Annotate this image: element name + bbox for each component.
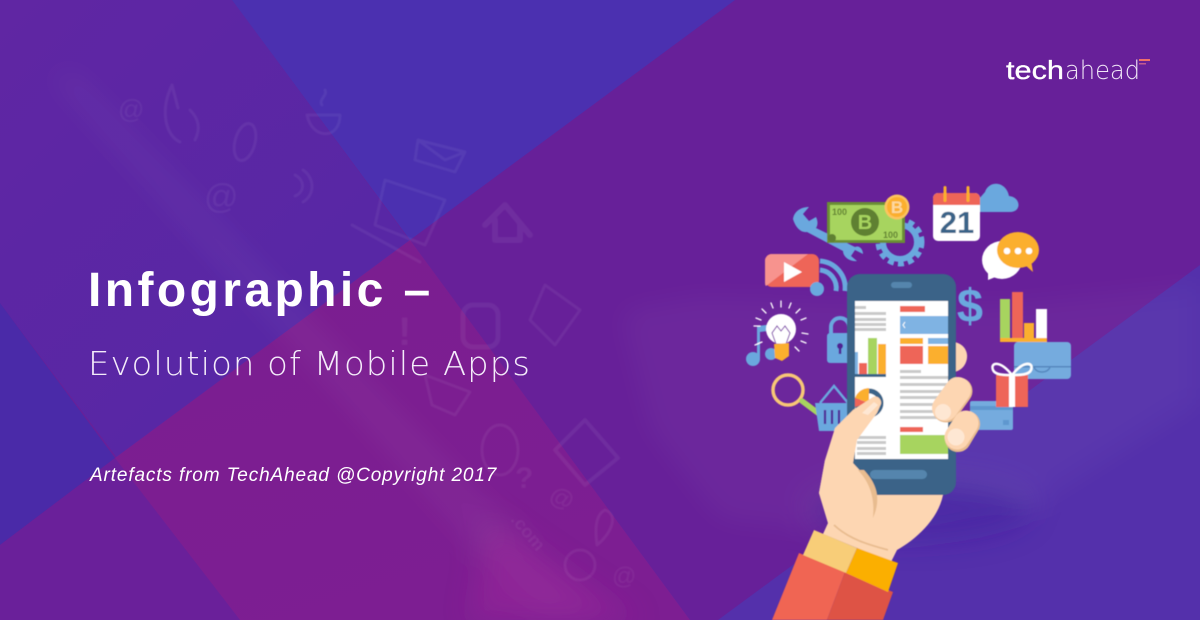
icon: dollar sign: $ [957,279,983,332]
icon: credit card [970,401,1013,430]
icon: padlock [827,318,852,363]
icon: shopping basket [815,386,852,431]
icon: gear [878,220,922,264]
phone screen [855,301,948,459]
hand: palm and wrist [819,460,943,562]
doodle: calendar [555,420,618,485]
doodle: tablet [425,375,470,415]
doodle: envelope [415,140,465,172]
icon: bitcoin banknote [828,204,904,242]
icon: wrench [793,207,863,261]
title: Infographic – [88,264,434,317]
hand: index finger [935,390,959,420]
icon: light bulb [754,301,808,361]
icon: video player [765,254,819,287]
doodle: phone handset [165,85,198,142]
icon: magnifying glass [773,375,818,413]
icon: bitcoin banknote: B [858,212,872,234]
screen: text lines [855,306,948,455]
logo: techahead: tech [1006,55,1064,85]
icon: gift [992,364,1032,407]
doodle: bulb [596,510,613,545]
icon: calendar: 21 [940,205,974,240]
doodle: clock [565,550,595,580]
doodle: cup [307,90,340,134]
icon: cloud [978,184,1019,212]
doodle: lock [463,305,498,347]
icon: bitcoin coin [884,194,910,220]
hand: thumb [819,397,881,523]
icon: calendar [933,186,980,241]
hand: back finger [952,342,967,372]
doodle: pin [482,425,518,475]
phone [847,274,956,495]
hand: wrist crease [834,525,888,550]
icon: speech bubbles [982,232,1039,280]
shirt sleeve [772,553,893,620]
doodle: symbols: .com [507,510,549,555]
icon: bar chart [1000,292,1047,342]
doodle: laptop [352,180,445,262]
doodle: symbols: ! [398,310,411,354]
hand: middle finger [948,423,967,446]
doodle: symbols [118,94,636,590]
icon: bitcoin banknote: 100 [832,207,847,217]
logo: techahead: ahead [1065,56,1140,86]
icon: music note [746,324,777,366]
doodle: symbols: @ [204,178,239,216]
screen: cards [900,306,948,454]
background doodle icons [118,85,636,590]
doodle: symbols: ? [515,462,533,495]
logo: techahead [1006,55,1150,86]
screen: bar chart [855,338,886,377]
icon: bitcoin coin: B [891,198,903,217]
doodle: symbols: @ [118,94,144,124]
icon: briefcase [1014,342,1071,379]
shirt cuff [803,530,898,592]
doodle: house [485,205,530,240]
doodle: symbols: @ [612,563,636,590]
subtitle: Evolution of Mobile Apps [88,344,531,383]
illustration: hand holding phone with app icons [746,184,1071,620]
screen: donut chart [855,388,881,415]
doodle: wifi [295,170,312,202]
doodle: symbols: @ [545,481,578,515]
doodle: mouse [230,121,260,163]
icon: bitcoin banknote: 100 [883,230,898,240]
doodle: notepad [530,285,580,345]
icon: wifi [810,261,845,296]
copyright line: Artefacts from TechAhead @Copyright 2017 [89,465,498,486]
